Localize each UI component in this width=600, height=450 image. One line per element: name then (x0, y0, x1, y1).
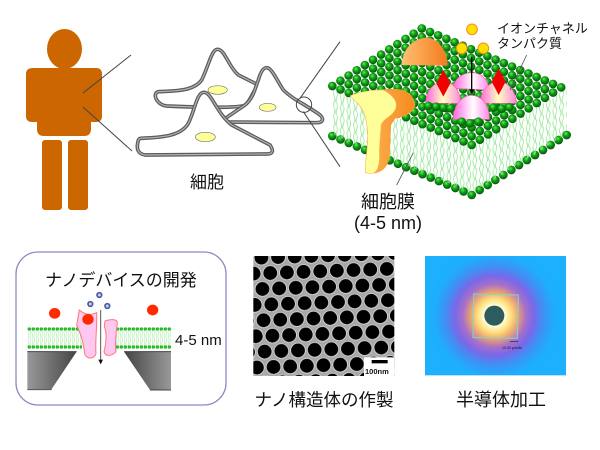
right leg (68, 140, 88, 210)
red ions (49, 305, 158, 325)
semiconductor micrograph (425, 256, 566, 375)
label: protein: タンパク質 (497, 36, 562, 51)
back left cell (155, 49, 258, 107)
scale bar (372, 360, 388, 363)
micro scale text: 10.00 μm/div (502, 346, 522, 350)
blue particles (88, 293, 110, 308)
scale bar text: 100nm (365, 367, 389, 376)
caption: semiconductor processing: 半導体加工 (456, 390, 546, 410)
panel heading: ナノデバイスの開発 (45, 270, 197, 290)
back dome (453, 73, 489, 90)
halo background (425, 256, 566, 375)
label: membrane thickness: (4-5 nm) (354, 213, 422, 233)
caption: nanostructure fabrication: ナノ構造体の作製 (254, 390, 394, 410)
ion channel protein (426, 69, 516, 119)
right red diamond (492, 69, 506, 95)
left leg (42, 140, 62, 210)
magnifier circle and lines (296, 42, 340, 167)
label: cell membrane: 細胞膜 (361, 192, 415, 212)
panel frame (16, 252, 226, 405)
pore arrow (98, 310, 103, 364)
back right nucleus (259, 103, 276, 111)
front cell (137, 92, 272, 155)
yellow transmembrane protein (350, 89, 415, 174)
back left nucleus (208, 86, 227, 94)
head (47, 29, 82, 69)
human figure (26, 29, 102, 210)
cell membrane diagram (328, 24, 571, 199)
zoom lines from body to cell (83, 55, 132, 151)
support base lines (27, 352, 171, 390)
ion flow arrow (469, 57, 474, 94)
left red diamond (436, 70, 450, 97)
front dome (453, 95, 489, 119)
chip square (473, 294, 518, 338)
micro scale (510, 341, 518, 343)
membrane right (115, 327, 171, 349)
scale bar box (364, 357, 394, 376)
torso and arms (26, 68, 102, 136)
device diagram (27, 293, 171, 390)
front nucleus (195, 132, 215, 142)
leader lines (397, 55, 527, 185)
back right cell (220, 68, 322, 123)
central hole (484, 306, 504, 326)
panel: nanodevice development (16, 252, 226, 405)
ions (456, 24, 489, 54)
label: ion channel protein: イオンチャネル (497, 21, 588, 36)
pore protein left (77, 310, 97, 358)
left dome (426, 82, 461, 103)
orange surface protein (402, 38, 447, 66)
lower lipid heads (328, 131, 571, 199)
nanostructure micrograph (253, 256, 394, 376)
porous lattice (253, 256, 394, 376)
pore protein right (104, 320, 117, 355)
right dome (480, 82, 516, 103)
membrane left (27, 327, 82, 349)
right support (124, 352, 171, 390)
left support (27, 352, 77, 389)
upper lipid heads (328, 24, 566, 149)
cells (137, 42, 340, 167)
lipid tails (332, 88, 567, 193)
thickness label: 4-5 nm (175, 332, 222, 349)
balls in front of channel (424, 102, 514, 128)
label: cell: 細胞 (190, 173, 224, 192)
